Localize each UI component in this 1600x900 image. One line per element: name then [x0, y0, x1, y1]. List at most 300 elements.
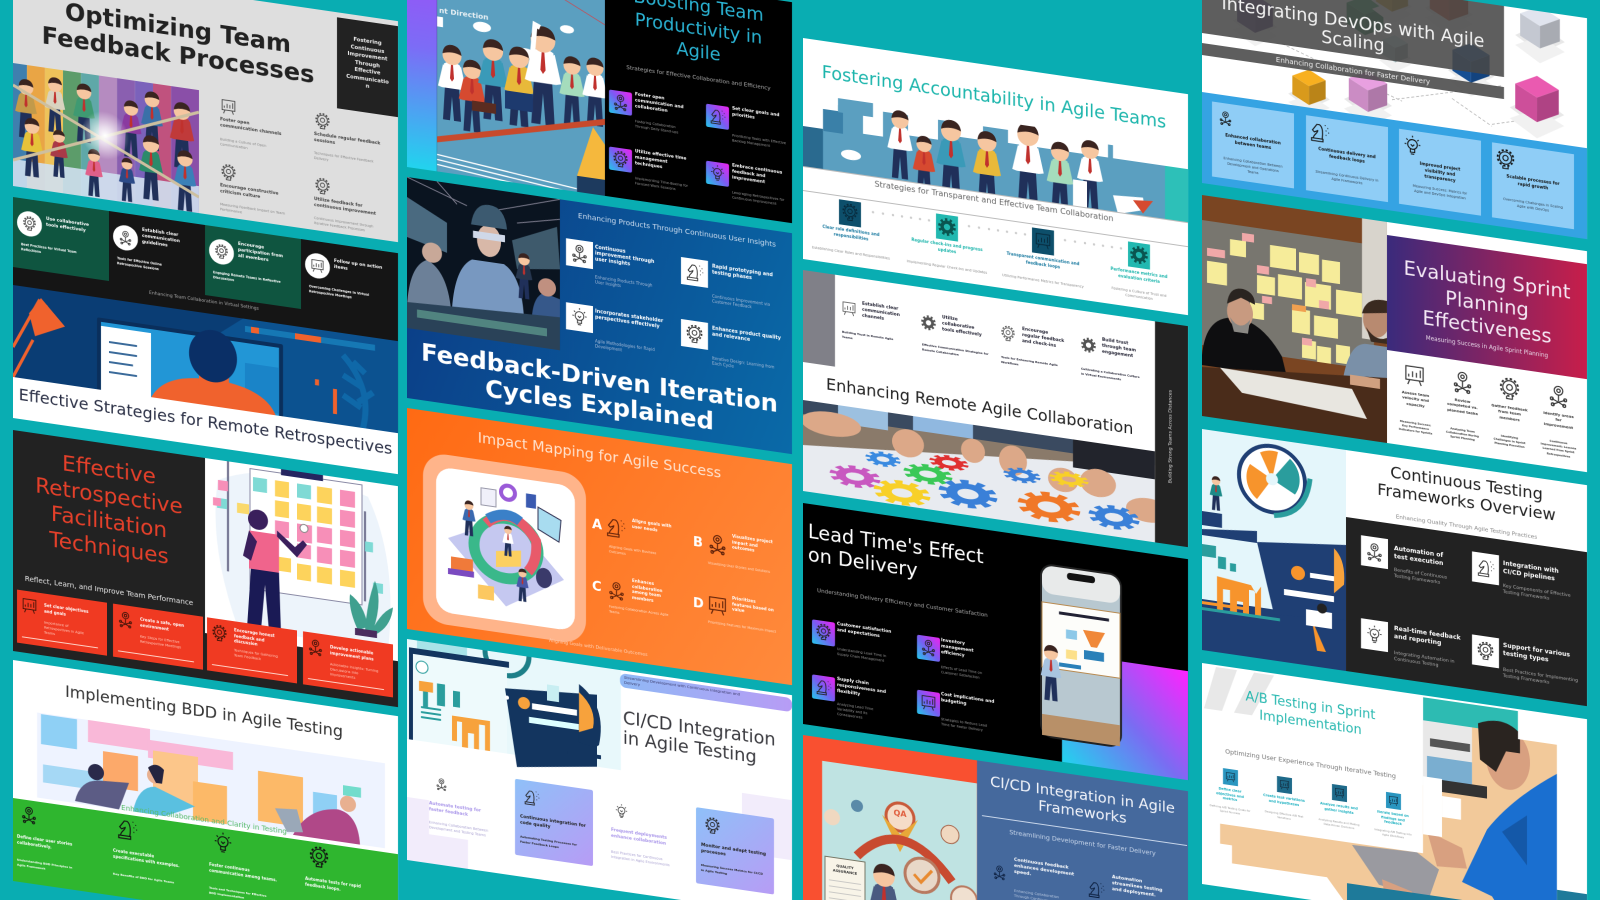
card: automate testing: faster feedback: [429, 807, 468, 818]
card: frequent deployments: Frequent deployments: [611, 828, 667, 841]
item: continuous feedback: feedback and: [732, 169, 765, 179]
title: Implementation: [1259, 708, 1362, 738]
item: rapid prototyping: testing phases: [712, 270, 752, 281]
item: constructive criticism: Performance: [220, 207, 242, 214]
QA text: QA: [894, 808, 906, 819]
item A: user needs: [632, 523, 657, 532]
item: customer satisfaction: Supply Chain Management: [837, 652, 884, 663]
item: testing types: [1472, 634, 1582, 700]
title: [1346, 457, 1587, 529]
item: test variations: Designing Effective A/B Test: [1265, 809, 1303, 819]
item: user insights: Continuous: [595, 245, 626, 255]
item: collaborative tools: [921, 312, 991, 367]
item: testing types: Testing Frameworks: [1503, 674, 1549, 686]
column backgrounds: green tiles: [13, 197, 301, 309]
card: continuous integration: [515, 779, 593, 866]
title: CI/CD Integration in Agile: [990, 773, 1175, 817]
title: on Delivery: [808, 543, 918, 582]
item: regular feedback: regular feedback: [1022, 333, 1064, 344]
title: Fostering Accountability in Agile Teams: [822, 63, 1166, 133]
item: participation: Encourage: [238, 242, 264, 251]
item: inventory: efficiency: [941, 650, 965, 659]
card: enhanced collaboration: between teams: [1235, 140, 1271, 150]
item: communication guidelines: Tools for Effective Online: [117, 256, 162, 267]
item: analyze results: Analyze results and: [1320, 801, 1358, 811]
item: CI/CD pipelines: Integration with: [1503, 560, 1559, 575]
item: continuous feedback: Leveraging Retrospectives for: [732, 190, 784, 202]
card: actionable plans: Discussions into: [330, 667, 358, 675]
item: utilize feedback: continuous improvement: [314, 203, 376, 217]
image: analytics dashboard illustration: [1202, 429, 1346, 671]
card: project visibility: visibility and: [1425, 168, 1455, 177]
item: communication guidelines: communication: [142, 234, 180, 244]
title: Retrospective: [35, 473, 183, 520]
card: enhanced collaboration: Development and Operations: [1227, 161, 1279, 173]
title: Frameworks: [1038, 797, 1127, 827]
card: monitor and adapt: [696, 807, 774, 895]
card: enhanced collaboration: [1212, 101, 1294, 188]
item: identify improvements: improvement: [1544, 420, 1573, 430]
item: gather feedback: Identifying: [1501, 434, 1518, 440]
item C: among team: [632, 589, 661, 598]
item: open communication: collaboration: [635, 104, 668, 114]
subtitle: Enhancing Collaboration and Clarity in Testing: [121, 803, 287, 836]
item: automation of test execution: Testing Frameworks: [1394, 574, 1440, 586]
image: two men at planning wall: [1202, 195, 1387, 443]
item: inventory: Inventory: [941, 638, 965, 647]
item: communication guidelines: [112, 225, 180, 271]
item: action items: Overcoming Challenges in Virtual: [309, 284, 369, 297]
item: foster open communication: Foster open: [220, 117, 249, 126]
title: Scaling: [1321, 27, 1385, 57]
item A: A: [592, 517, 602, 533]
item: identify improvements: [1535, 382, 1582, 466]
item: product quality: [680, 319, 781, 370]
item: utilize feedback: Continuous Improvement through: [314, 216, 373, 229]
image: dashboard illustration: [407, 639, 621, 770]
item: assess velocity: [1392, 361, 1439, 446]
item: cost implications: [917, 689, 1012, 747]
subtitle band: Enhancing Collaboration for Faster Delivery: [1276, 55, 1430, 86]
item: transparent communication: feedback loops: [1026, 259, 1060, 269]
item: performance metrics: Communication: [1125, 293, 1153, 301]
card: project visibility: [1399, 129, 1481, 216]
item: user stories: Agile Framework: [17, 862, 45, 871]
item: gather feedback: Gather feedback: [1491, 402, 1528, 413]
item: identify improvements: for: [1555, 417, 1562, 423]
item: communication channels: Building Trust in Remote Agile: [842, 330, 893, 341]
card: continuous integration: code quality: [520, 820, 550, 830]
item: test variations: and hypotheses: [1269, 798, 1299, 807]
item: real-time feedback: Continuous Testing: [1394, 657, 1438, 668]
item: automation: Automation: [1112, 875, 1142, 884]
gradient stripe: [407, 0, 437, 171]
item: schedule regular feedback: Delivery: [314, 156, 329, 162]
subtitle: Reflect, Learn, and Improve Team Performance: [25, 574, 193, 607]
item C: C: [592, 579, 602, 595]
item: collaborative tools: Remote Collaboration: [922, 347, 959, 357]
item: stakeholder perspectives: perspectives effectively: [595, 315, 660, 330]
item: continuous feedback: [706, 160, 784, 206]
item D: [693, 595, 776, 634]
title: Lead Time's Effect: [808, 520, 984, 568]
footer caption: Aligning Goals with Deliverable Outcomes: [549, 639, 648, 658]
item: stakeholder perspectives: Agile Methodologies for Rapid: [595, 338, 655, 352]
white text panel: [1202, 663, 1423, 853]
item: stakeholder perspectives: [566, 302, 664, 352]
panel: Feedback-Driven Iteration Cycles Explained: [407, 177, 792, 454]
subtitle pill: Streamlining Development with Continuous Integration and: [624, 675, 740, 697]
card: scalable processes: [1492, 142, 1574, 229]
panel: Lead Time's Effect on Delivery: [803, 503, 1188, 780]
item: assess velocity: capacity: [1406, 400, 1425, 408]
panel: CI/CD Integration in Agile Frameworks: [803, 735, 1188, 900]
title: Continuous Testing: [1390, 462, 1543, 504]
card: safe environment: environment: [140, 622, 169, 631]
title: Effectiveness: [1422, 306, 1552, 348]
item: CI/CD pipelines: Testing Frameworks: [1503, 590, 1549, 602]
card: actionable plans: Develop actionable: [330, 644, 373, 656]
title: Evaluating Sprint: [1404, 256, 1570, 304]
card: honest feedback: [207, 617, 297, 683]
item: define objectives: metrics: [1223, 796, 1237, 802]
card: scalable processes: Agile with DevOps: [1517, 204, 1549, 212]
item: utilize feedback: Iterative Feedback Processes: [314, 221, 365, 232]
panel: A/B Testing in Sprint Implementation: [1202, 663, 1587, 900]
item: review tasks: Analyzing Team: [1450, 426, 1475, 434]
item: user insights: user insights: [595, 257, 630, 268]
card: clear objectives: and goals: [44, 608, 66, 616]
caption: Enhancing Team Collaboration in Virtual Settings: [149, 291, 259, 312]
item C: collaboration: [632, 583, 662, 593]
panel: Impact Mapping for Agile Success: [407, 408, 792, 685]
title: [1387, 254, 1587, 354]
item: real-time feedback: Integrating Automation in: [1394, 651, 1454, 665]
item: assess velocity: Key Performance: [1402, 423, 1429, 431]
card: automate testing: [429, 774, 507, 846]
item: communication guidelines: guidelines: [142, 240, 168, 249]
card: clear objectives: Teams: [44, 630, 55, 636]
item: regular feedback: and check-ins: [1022, 339, 1056, 349]
title: [35, 451, 183, 570]
item: product quality: Each Cycle: [712, 360, 734, 368]
item: review tasks: Sprint Planning: [1450, 435, 1475, 442]
item: review tasks: [1439, 368, 1486, 452]
item: review tasks: completed vs.: [1447, 401, 1478, 411]
item: collaborative tools: tools effectively: [46, 223, 86, 234]
item: executable specifications: Create executable: [113, 848, 154, 859]
subtitle: Optimizing User Experience Through Iterative Testing: [1225, 747, 1396, 780]
card: safe environment: Retrospective Meetings: [140, 639, 181, 649]
item: collaborative tools: Effective Communication Strategies for: [922, 342, 989, 356]
item: gather feedback: from team: [1498, 408, 1521, 417]
item: user stories: [16, 806, 72, 871]
subtitle pill: [620, 673, 792, 712]
item: CI/CD pipelines: Key Components of Effective: [1503, 584, 1571, 599]
item: communication guidelines: Retrospective Sessions: [117, 261, 159, 271]
item D: value: [732, 606, 745, 613]
item: participation: [208, 239, 283, 284]
panel: Optimizing Team Feedback Processes: [13, 0, 398, 242]
blue panel: [1202, 92, 1587, 239]
item: utilize feedback: Utilize feedback for: [314, 197, 362, 209]
item: iterate: feedback: [1384, 820, 1402, 826]
title: Enhancing Remote Agile Collaboration: [826, 374, 1133, 438]
decorative tiles: [407, 797, 468, 869]
item: continuous communication: BDD Implementation: [209, 890, 244, 900]
item: identify improvements: Retrospectives: [1547, 451, 1570, 458]
item: automate tests: feedback loops.: [305, 882, 341, 892]
item: analyze results: [1312, 779, 1366, 842]
item: user insights: [566, 238, 654, 288]
item: customer satisfaction: [812, 618, 907, 677]
item A: Outcomes: [609, 549, 626, 555]
item: automation of test execution: test execution: [1394, 553, 1443, 567]
item: automation of test execution: Benefits of Continuous: [1394, 568, 1447, 581]
item: cost implications: Strategies to Reduce Lead: [941, 717, 987, 728]
item: iterate: findings and: [1381, 815, 1405, 822]
item: open communication: communication and: [635, 98, 684, 110]
item: real-time feedback: [1361, 618, 1471, 684]
card: project visibility: Improved project: [1420, 161, 1460, 172]
item: check-ins: [899, 208, 995, 282]
item: schedule regular feedback: [314, 112, 380, 164]
item: participation: Discussions: [213, 275, 234, 282]
item: user insights: Enhancing Products Through: [595, 274, 652, 288]
title band: [1202, 0, 1504, 77]
item: regular feedback: Encourage: [1022, 327, 1048, 336]
card: honest feedback: feedback and: [234, 633, 264, 642]
item: inventory: [917, 634, 1012, 692]
item: stakeholder perspectives: Development: [595, 343, 622, 352]
item D: Prioritizes: [732, 595, 756, 604]
panel: Effective Strategies for Remote Retrospectives: [13, 197, 398, 474]
card: project visibility: transparency: [1424, 173, 1456, 183]
item: define objectives: [1205, 763, 1255, 826]
image: futuristic control room: [407, 177, 560, 350]
item: collaborative tools: Use collaborative: [46, 217, 89, 228]
item B: outcomes: [732, 544, 754, 553]
item: schedule regular feedback: sessions: [314, 138, 335, 146]
item C: Teams: [609, 609, 619, 614]
item: time management: [608, 146, 688, 191]
item: automation: and deployment.: [1112, 887, 1156, 898]
item: test variations: [1257, 771, 1311, 834]
title: A/B Testing in Sprint: [1246, 689, 1375, 723]
item D: Prioritizing Features for Maximum Impact: [708, 620, 776, 634]
item: gather feedback: Challenges in Sprint: [1494, 437, 1525, 445]
item: supply chain: flexibility: [837, 689, 860, 697]
vertical caption: Building Strong Teams Across Distances: [1168, 390, 1174, 484]
image: isometric project illustration: [423, 451, 586, 645]
item: testing types: Support for various: [1503, 642, 1570, 659]
decorative quote marks: [1202, 663, 1277, 724]
card: scalable processes: Overcoming Challenges in Scaling: [1503, 197, 1563, 210]
item: build trust: [1081, 335, 1151, 390]
item: product quality: Iterative Design: Learning from: [712, 355, 774, 370]
card: clear objectives: Importance of: [44, 621, 69, 628]
document heading: ASSURANCE: [833, 868, 857, 876]
title: [1202, 682, 1419, 748]
card: actionable plans: Improvements: [330, 672, 355, 680]
image: person at sticky note wall: [204, 458, 398, 662]
item: communication channels: communication: [862, 308, 900, 318]
item: iterate: Iterate based on: [1377, 810, 1409, 818]
item: test variations: Variations: [1277, 815, 1291, 821]
item: performance metrics: Fostering a Culture of Trust and: [1111, 286, 1167, 298]
item: collaborative tools: Reflections: [21, 247, 41, 254]
item: automation: [1087, 871, 1182, 900]
item A: [592, 517, 672, 555]
card: automate testing: Enhancing Collaboration Between: [429, 820, 488, 833]
title: Facilitation: [51, 502, 167, 543]
image: isometric infrastructure cubes: [1202, 0, 1587, 150]
item: communication channels: Establish clear: [862, 302, 898, 312]
title: [633, 0, 764, 66]
subtitle: Strategies for Effective Collaboration and Efficiency: [626, 65, 771, 92]
item: regular feedback: Tools for Enhancing Remote Agile: [1001, 355, 1058, 367]
item: time management: Utilize effective time: [635, 149, 686, 162]
item: communication guidelines: Establish clear: [142, 228, 178, 238]
item: foster open communication: Building a Culture of Open: [220, 137, 266, 148]
item: automate tests: Automate tests for rapid: [305, 876, 361, 889]
card: continuous integration: Faster Feedback Loops: [520, 839, 559, 849]
item: constructive criticism: Measuring Feedback Impact on Team: [220, 202, 285, 216]
card: enhanced collaboration: Teams: [1247, 169, 1259, 175]
item: iterate: Integrating A/B Testing into: [1374, 827, 1412, 837]
card: scalable processes: rapid growth: [1518, 181, 1548, 191]
item: performance metrics: [1091, 236, 1187, 310]
item: gather feedback: members: [1499, 414, 1520, 422]
item: executable specifications: Key Benefits of BDD for Agile Teams: [113, 872, 174, 885]
title: Frameworks Overview: [1377, 479, 1556, 524]
item: cost implications: Cost implications and: [941, 692, 994, 705]
item: continuous feedback: [992, 855, 1077, 900]
item: product quality: and relevance: [712, 332, 750, 343]
side callout: [337, 17, 398, 117]
card: continuous delivery: [1306, 115, 1388, 202]
item: analyze results: gather insights: [1324, 806, 1354, 815]
item: build trust: in Virtual Environments: [1081, 371, 1121, 381]
item: open communication: Foster open: [635, 92, 664, 102]
card: monitor and adapt: in Agile Testing: [701, 868, 727, 875]
card: frequent deployments: Integration in Agile Environments: [611, 855, 670, 867]
subtitle pill: Delivery: [624, 680, 640, 687]
title: Implementing BDD in Agile Testing: [65, 682, 343, 741]
item: participation: participation from: [238, 248, 283, 259]
item: iterate: [1366, 787, 1420, 850]
item: open communication: Fostering Collaboration: [635, 119, 676, 129]
gradient title panel: [1387, 235, 1587, 379]
item: action items: items: [334, 265, 348, 272]
item: performance metrics: evaluation criteria: [1118, 273, 1160, 284]
card: frequent deployments: enhance collaboration: [611, 834, 666, 847]
dark panel: [1346, 517, 1587, 706]
panel: CI/CD Integration in Agile Testing: [407, 639, 792, 900]
item: communication channels: channels: [862, 314, 884, 322]
title: Feedback-Driven Iteration: [421, 338, 778, 418]
item A: Aligning Goals with Business: [609, 544, 656, 555]
item: supply chain: Variability and Its: [837, 707, 867, 715]
item: clear goals: Backlog Management: [732, 138, 770, 148]
side callout: Fostering: [353, 37, 382, 47]
side callout: n: [366, 83, 369, 90]
item: real-time feedback: Real-time feedback: [1394, 625, 1461, 642]
item: build trust: through team: [1102, 344, 1136, 354]
item: identify improvements: Continuous: [1550, 439, 1567, 445]
item: assess velocity: velocity and: [1402, 394, 1429, 403]
image: team with sticky notes: [37, 712, 385, 848]
item: automation: streamlines testing: [1112, 881, 1162, 893]
item: clear goals: [706, 104, 786, 148]
panel: Integrating DevOps with Agile Scaling: [1202, 0, 1587, 239]
card: continuous delivery: Continuous delivery and: [1318, 146, 1376, 159]
item: continuous feedback: Continuous Improvement: [732, 195, 776, 206]
card: actionable plans: improvement plans: [330, 650, 374, 661]
card: automate testing: Automate testing for: [429, 801, 481, 814]
item: user stories: Understanding BDD Principles in: [17, 858, 72, 870]
title: [977, 771, 1188, 836]
side callout: Communicatio: [346, 73, 389, 85]
subtitle band: [1202, 43, 1504, 99]
card: clear objectives: Set clear objectives: [44, 603, 88, 614]
item: customer satisfaction: and expectations: [837, 628, 880, 639]
card: clear objectives: [17, 590, 107, 656]
image: hands over gears: [803, 400, 1155, 542]
item: assess velocity: Measuring Success:: [1400, 419, 1431, 427]
item: analyze results: Analyzing Results and Making: [1318, 817, 1360, 827]
item: schedule regular feedback: Techniques for Effective Feedback: [314, 151, 374, 164]
card: scalable processes: Scalable processes for: [1506, 173, 1560, 186]
subtitle: Measuring Success in Agile Sprint Planning: [1426, 336, 1548, 360]
item: supply chain: Consequences: [837, 712, 862, 719]
band lines: [803, 166, 1188, 247]
item A: Aligns goals with: [632, 518, 672, 529]
item D: features based on: [732, 601, 774, 612]
item: open communication: Through Daily Stand-ups: [635, 124, 678, 134]
item: executable specifications: [112, 820, 180, 885]
image caption: nt Direction: [439, 6, 488, 22]
item: constructive criticism: [220, 164, 285, 216]
item: collaborative tools: [16, 211, 89, 254]
card: frequent deployments: Best Practices for Continuous: [611, 850, 662, 861]
item: open communication: [608, 90, 684, 134]
orange backdrop: [803, 735, 977, 900]
card: automate testing: Development and Testing Teams: [429, 825, 486, 837]
item: time management: Focused Work Sessions: [635, 181, 676, 191]
item: continuous feedback: improvement: [732, 175, 765, 185]
footer title: Effective Strategies for Remote Retrospectives: [19, 385, 392, 458]
item: time management: management: [635, 155, 668, 165]
title: in Agile Testing: [623, 729, 757, 768]
item: clear roles: [803, 194, 899, 268]
item: automation of test execution: Automation of: [1394, 545, 1443, 559]
item: CI/CD pipelines: CI/CD pipelines: [1503, 568, 1555, 582]
card: enhanced collaboration: Enhanced collaboration: [1225, 132, 1281, 145]
item: testing types: Best Practices for Implementing: [1503, 668, 1578, 684]
title: Techniques: [49, 527, 169, 570]
divider: [982, 815, 1187, 846]
item: action items: Follow up on action: [334, 259, 382, 271]
item: collaborative tools: Best Practices for Virtual Team: [21, 242, 77, 254]
item: CI/CD pipelines: [1472, 551, 1582, 622]
item: continuous feedback: Continuous feedback: [1014, 858, 1069, 871]
subtitle: Enhancing Quality Through Agile Testing Practices: [1396, 514, 1537, 541]
title: CI/CD Integration: [623, 709, 776, 751]
panel: Boosting Team Productivity in Agile: [407, 0, 792, 223]
item: user insights: improvement through: [595, 251, 654, 265]
item: clear goals: priorities: [732, 112, 755, 121]
